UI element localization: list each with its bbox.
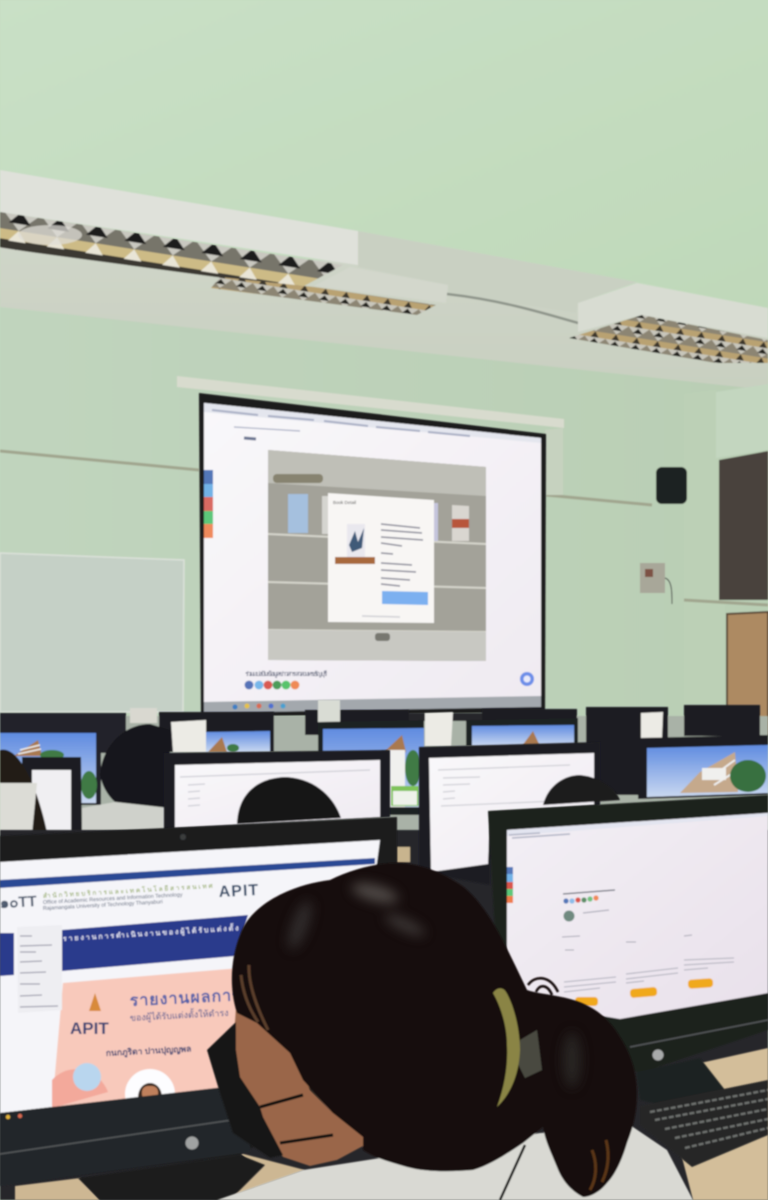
wall speaker xyxy=(656,467,687,504)
student head middle-left xyxy=(237,777,341,824)
conduit xyxy=(447,294,578,323)
student head middle-right xyxy=(543,775,620,805)
flipbook shelf xyxy=(268,450,486,661)
earphone cable xyxy=(500,1145,525,1200)
monitor right xyxy=(638,735,768,799)
keyboard xyxy=(640,1080,768,1167)
logo left: ๑๐TT xyxy=(0,893,37,912)
share bar xyxy=(204,470,213,538)
wall switch box xyxy=(640,563,665,593)
upper green soffit xyxy=(0,0,768,308)
logo xyxy=(564,910,574,922)
far monitors xyxy=(0,705,760,795)
taskbar icons xyxy=(6,1114,22,1119)
right desk xyxy=(660,1048,768,1200)
monitor bezel xyxy=(488,795,768,1073)
social icons xyxy=(245,681,299,689)
monitor middle-right xyxy=(419,742,600,885)
round badge xyxy=(73,1063,101,1091)
monitor back-centre xyxy=(318,720,424,815)
logo right: APIT xyxy=(218,882,260,901)
paper notes xyxy=(130,700,663,752)
flyaway hair xyxy=(528,978,558,995)
monitor back-centre-right xyxy=(466,718,578,746)
paper far-left xyxy=(0,783,37,834)
monitor stand xyxy=(78,1155,265,1200)
ok button xyxy=(382,591,428,605)
fringe strand xyxy=(241,965,268,1030)
screen caption: ร่วมแบ่งปันข้อมูลข่าวสาร สวส. มทร.ธัญบุรี xyxy=(245,670,328,678)
page label xyxy=(244,438,256,439)
back wall xyxy=(0,300,768,840)
student far-left xyxy=(0,750,47,832)
pink swoosh xyxy=(52,1069,108,1108)
middle row of computers xyxy=(164,742,620,885)
hair band xyxy=(516,1030,542,1078)
header english second line: Rajamangala University of Technology Thanyaburi xyxy=(43,899,163,912)
face skin xyxy=(233,1008,363,1166)
navy title band xyxy=(62,915,248,971)
front right computer xyxy=(488,795,768,1167)
dropdown menu xyxy=(17,925,62,1013)
white shirt xyxy=(217,1127,693,1200)
poster name: กนกภูริดา ปานปุญญพล xyxy=(106,1044,192,1059)
share bar xyxy=(507,867,513,903)
orange buttons xyxy=(575,978,713,1006)
ponytail tips xyxy=(590,1140,608,1190)
projector screen xyxy=(199,393,546,717)
hp logo right xyxy=(652,1050,664,1060)
beam face xyxy=(358,231,637,313)
whiteboard xyxy=(0,553,184,712)
text columns xyxy=(564,958,734,992)
screen surface xyxy=(204,403,541,703)
poster subheading: ของผู้ได้รับแต่งตั้งให้ดำรง xyxy=(129,1006,229,1024)
student back-left xyxy=(82,724,170,832)
monitor stand xyxy=(636,1058,725,1107)
book cover xyxy=(335,524,375,564)
monitor back-centre-left xyxy=(206,731,270,752)
monitor screen xyxy=(507,813,768,1019)
gap behind front monitors xyxy=(0,830,768,1200)
webcam xyxy=(180,834,186,840)
black face mask xyxy=(207,1022,283,1158)
book detail dialog xyxy=(328,493,434,623)
social icons xyxy=(563,895,599,904)
blue top band xyxy=(0,858,375,888)
crest xyxy=(89,993,101,1011)
small monitor left xyxy=(22,757,82,832)
hair shine xyxy=(284,879,581,1088)
monitor back-left xyxy=(0,724,101,805)
desk surfaces xyxy=(15,1048,768,1200)
portrait xyxy=(125,1069,175,1119)
chat button xyxy=(520,672,534,686)
hp logo xyxy=(186,1136,198,1150)
hair clip xyxy=(493,988,520,1107)
wall rail lines xyxy=(0,451,768,605)
header title text: สำนักวิทยบริการและเทคโนโลยีสารสนเทศ xyxy=(43,882,214,900)
header english: Office of Academic Resources and Information Technology xyxy=(43,892,183,906)
monitor bezel xyxy=(0,817,397,1186)
back row of computers xyxy=(0,700,768,834)
student in foreground xyxy=(207,863,693,1200)
mask straps xyxy=(260,1095,333,1143)
poster logo: APIT xyxy=(70,1019,109,1038)
hair xyxy=(232,863,637,1197)
front left computer xyxy=(0,817,397,1200)
dark window panel xyxy=(719,451,768,600)
monitor screen xyxy=(0,840,380,1113)
poster heading: รายงานผลการดำ xyxy=(129,985,263,1010)
monitor middle-left xyxy=(164,750,390,830)
right pillar xyxy=(684,390,725,735)
navy title text: รายงานการดำเนินงานของผู้ได้รับแต่งตั้ง xyxy=(62,921,239,944)
left desk xyxy=(15,1178,100,1200)
browser bar xyxy=(507,813,768,836)
monitor chin line xyxy=(630,1020,768,1047)
screen frame xyxy=(199,393,546,717)
room background xyxy=(0,0,768,840)
projector casing xyxy=(177,376,564,428)
ceiling light right xyxy=(569,283,768,363)
browser tabs xyxy=(204,403,541,443)
wooden door xyxy=(727,612,768,735)
ceiling light centre xyxy=(211,267,448,315)
book detail dialog: Book Detail xyxy=(333,500,356,505)
ceiling light left xyxy=(0,170,358,286)
ceiling xyxy=(0,245,768,390)
monitor chin xyxy=(0,1084,250,1186)
pink poster xyxy=(52,968,240,1108)
taskbar xyxy=(204,696,541,713)
